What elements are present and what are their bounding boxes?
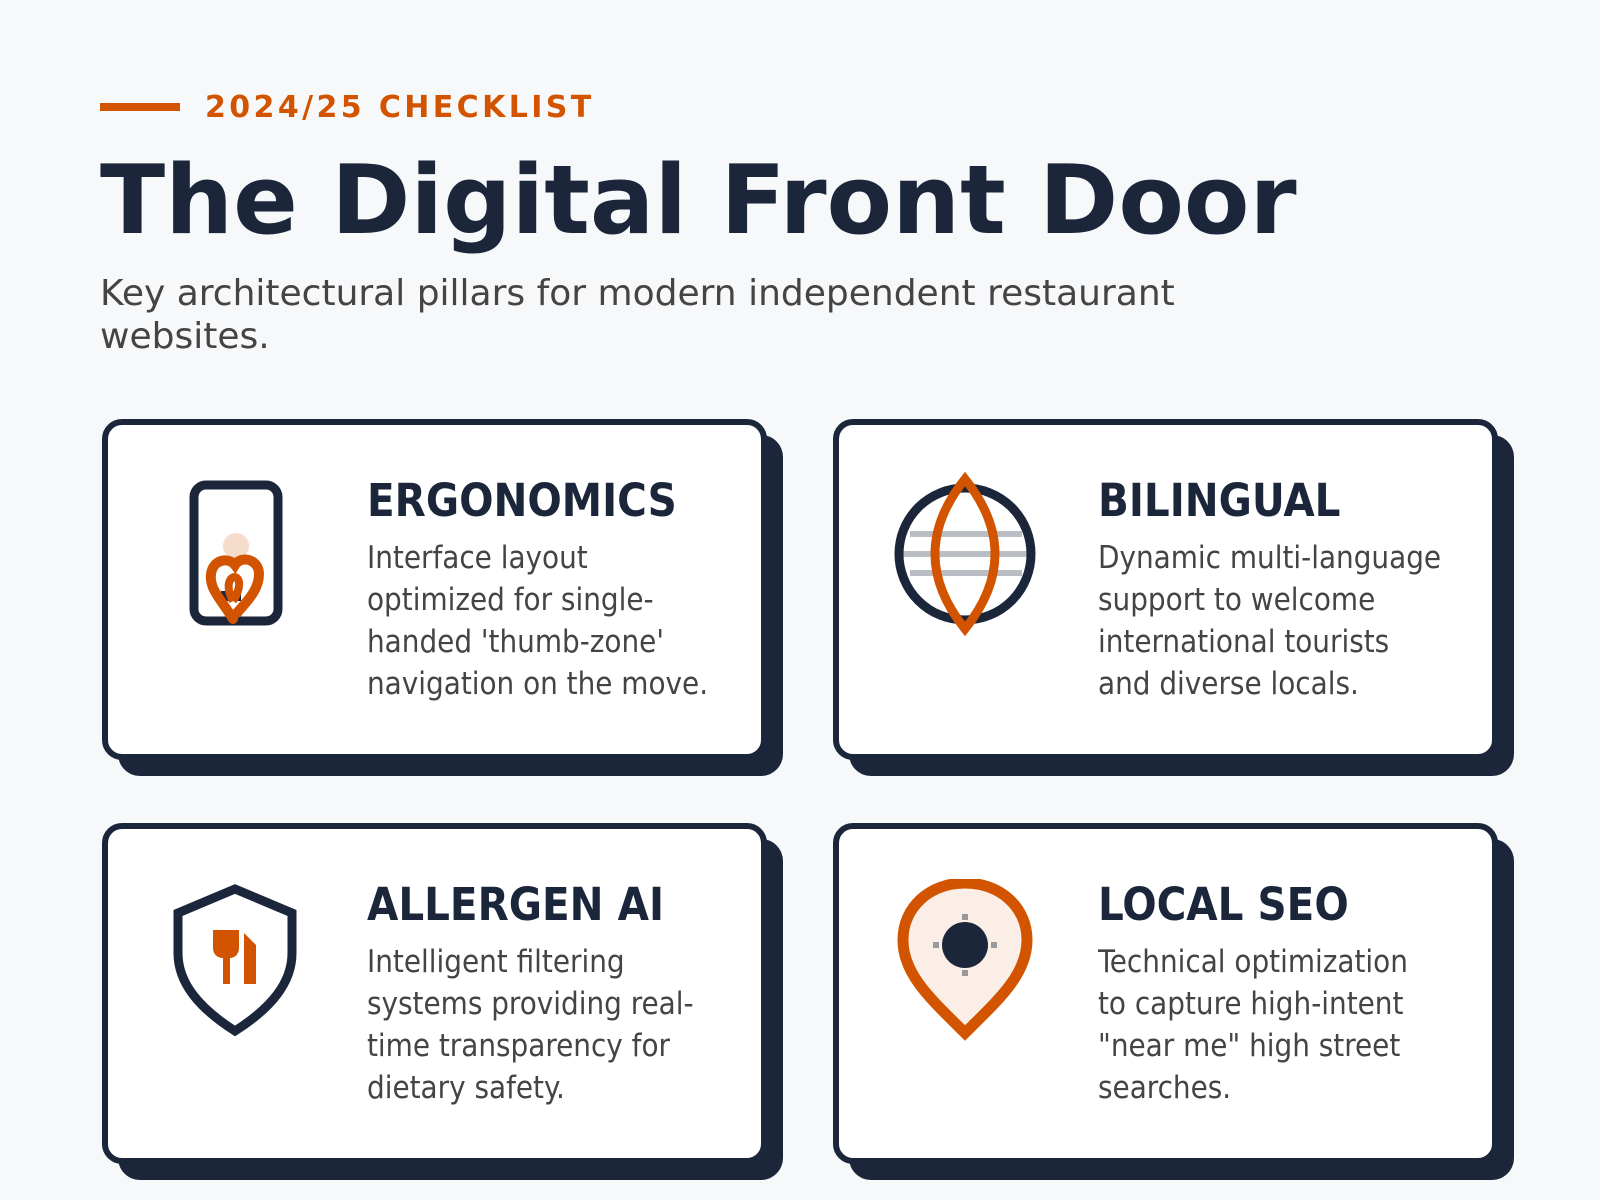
body text: Interface layout optimized for single-handed 'thumb-zone' navigation on the move. <box>367 540 708 702</box>
card: bilingual <box>833 419 1514 776</box>
icon: map pin <box>898 879 1032 1041</box>
accent line <box>100 103 180 111</box>
card: ergonomics <box>102 419 783 776</box>
heading: BILINGUAL <box>1098 474 1340 527</box>
eyebrow label: 2024/25 CHECKLIST <box>205 90 595 125</box>
icon: shield with cutlery <box>174 884 296 1036</box>
subtitle: Key architectural pillars for modern independent restaurant <box>100 273 1175 314</box>
card: allergen ai <box>102 823 783 1180</box>
heading: LOCAL SEO <box>1098 878 1349 931</box>
subtitle: websites. <box>100 316 270 357</box>
icon: globe <box>894 472 1036 636</box>
body text: Intelligent filtering systems providing real-time transparency for dietary safety. <box>367 944 694 1106</box>
body text: Dynamic multi-language support to welcome international tourists and diverse locals. <box>1098 540 1441 702</box>
title: The Digital Front Door <box>100 144 1297 256</box>
icon: phone with thumb <box>190 480 282 626</box>
body text: Technical optimization to capture high-intent "near me" high street searches. <box>1098 944 1408 1106</box>
heading: ERGONOMICS <box>367 474 677 527</box>
subtitle <box>100 273 1175 357</box>
heading: ALLERGEN AI <box>367 878 664 931</box>
card: local seo <box>833 823 1514 1180</box>
